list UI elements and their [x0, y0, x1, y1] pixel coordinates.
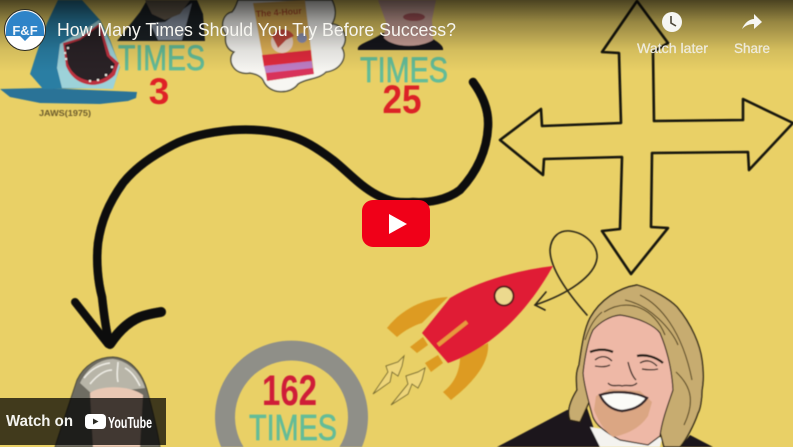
label: share: Share — [734, 40, 770, 56]
youtube logo: YouTube — [108, 415, 152, 432]
youtube logo — [85, 414, 152, 432]
watch later button — [637, 12, 708, 56]
man portrait with TIMES 3 — [117, 0, 205, 112]
smiling man portrait — [497, 285, 713, 447]
shark: Jaws poster — [0, 0, 137, 118]
label: watch later: Watch later — [637, 40, 708, 56]
curved black arrow — [75, 82, 488, 344]
looped thin arrow — [535, 231, 597, 315]
older woman portrait — [55, 357, 160, 447]
number: 3: 3 — [149, 71, 169, 112]
thought cloud with book — [223, 0, 345, 92]
caption: JAWS (1975): JAWS(1975) — [39, 109, 91, 118]
woman portrait with TIMES 25 — [358, 0, 448, 122]
video title: How Many Times Should You Try Before Success? — [57, 20, 456, 40]
book title: The 4-Hour — [255, 6, 302, 19]
four-way cross arrow — [500, 1, 793, 274]
avatar letters: F&F — [12, 23, 38, 38]
label: watch on: Watch on — [6, 413, 73, 430]
rocket — [373, 266, 553, 405]
number: 25: 25 — [382, 78, 422, 122]
label: TIMES: TIMES — [118, 39, 205, 78]
share button — [734, 14, 770, 56]
top shade gradient — [0, 0, 793, 72]
channel avatar — [4, 10, 46, 50]
label: TIMES: TIMES — [249, 407, 337, 447]
gray ring with 162 TIMES — [215, 341, 368, 447]
exhaust flames — [373, 356, 425, 405]
watch on youtube bar — [0, 398, 166, 445]
play button — [362, 200, 430, 247]
number: 162: 162 — [262, 367, 317, 415]
icon: clock — [662, 12, 682, 32]
label: TIMES: TIMES — [360, 51, 448, 90]
icon: share arrow — [742, 14, 762, 29]
